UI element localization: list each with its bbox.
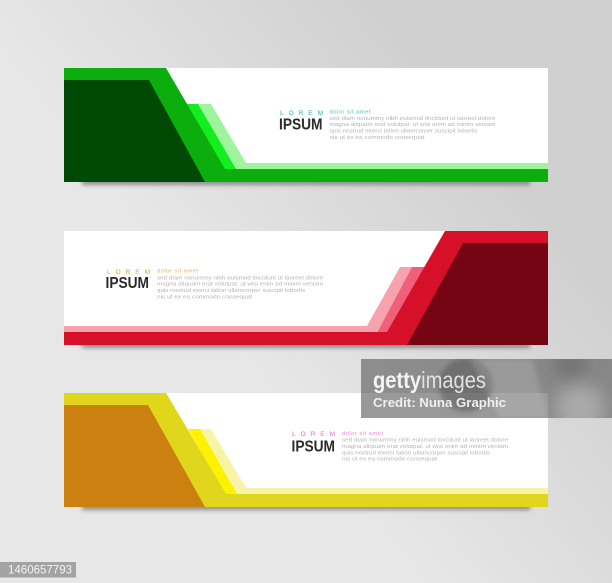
id number: 1460657793 xyxy=(8,564,72,576)
body text xyxy=(157,276,323,300)
text: heading xyxy=(292,431,508,463)
text: heading xyxy=(279,110,496,141)
body text: nis ut ex ea commodo consequat xyxy=(342,457,438,463)
credit text: Credit: Nuna Graphic xyxy=(373,395,506,410)
orange block xyxy=(64,405,205,507)
body text xyxy=(342,438,508,463)
subheading: dolor sit amet xyxy=(342,431,383,437)
shadow xyxy=(82,342,530,348)
lorem label: LOREM xyxy=(292,431,335,438)
pale pink stripe xyxy=(64,267,412,333)
banner: yellow xyxy=(64,393,548,510)
bright green stripe xyxy=(187,104,236,171)
watermark: getty images xyxy=(361,359,612,418)
body text: magna aliquam erat volutpat. ut wisi enim ad minim veniam xyxy=(157,282,323,288)
ipsum title: IPSUM xyxy=(292,438,335,456)
image id tag xyxy=(0,562,76,578)
getty logo text: gettyimages xyxy=(373,367,486,393)
hot pink stripe xyxy=(377,267,425,333)
body text: quis nostrud exerci tation ullamcorper suscipit lobortis xyxy=(330,128,478,134)
body text: sed diam nonummy nibh euismod tincidunt ut laoreet dolore xyxy=(330,116,496,122)
watermark texture xyxy=(438,359,608,418)
ipsum title: IPSUM xyxy=(279,116,322,134)
white panel xyxy=(64,68,548,182)
dark maroon block xyxy=(407,243,548,345)
body text: magna aliquam erat volutpat. ut wisi enim ad minim veniam xyxy=(330,122,496,128)
subheading: dolor sit amet xyxy=(157,268,198,274)
olive yellow band xyxy=(64,393,548,507)
watermark band xyxy=(361,359,612,418)
tag background xyxy=(0,562,76,578)
bright yellow stripe xyxy=(188,429,237,496)
body text: quis nostrud exerci tation ullamcorper suscipit lobortis xyxy=(157,288,305,294)
text: heading xyxy=(106,268,323,300)
banner: red xyxy=(64,231,548,348)
lorem label: LOREM xyxy=(280,110,323,117)
banner: green xyxy=(64,68,548,185)
lorem label: LOREM xyxy=(107,269,150,276)
pale green stripe xyxy=(198,104,548,171)
subheading: dolor sit amet xyxy=(330,110,371,116)
red band xyxy=(64,231,548,345)
mid green band xyxy=(64,68,548,182)
white panel xyxy=(64,393,548,507)
dark green block xyxy=(64,80,205,182)
body text: sed diam nonummy nibh euismod tincidunt ut laoreet dolore xyxy=(157,276,323,282)
white panel xyxy=(64,231,548,345)
pale yellow stripe xyxy=(200,429,548,496)
body text: sed diam nonummy nibh euismod tincidunt ut laoreet dolore xyxy=(342,438,508,444)
body text: nis ut ex ea commodo consequat xyxy=(157,294,253,300)
body text: magna aliquam erat volutpat. ut wisi enim ad minim veniam xyxy=(342,444,508,450)
shadow xyxy=(82,504,530,510)
body text xyxy=(330,116,496,141)
body text: nis ut ex ea commodo consequat xyxy=(330,135,425,141)
shadow xyxy=(82,179,530,185)
body text: quis nostrud exerci tation ullamcorper suscipit lobortis xyxy=(342,450,490,456)
ipsum title: IPSUM xyxy=(106,275,149,292)
